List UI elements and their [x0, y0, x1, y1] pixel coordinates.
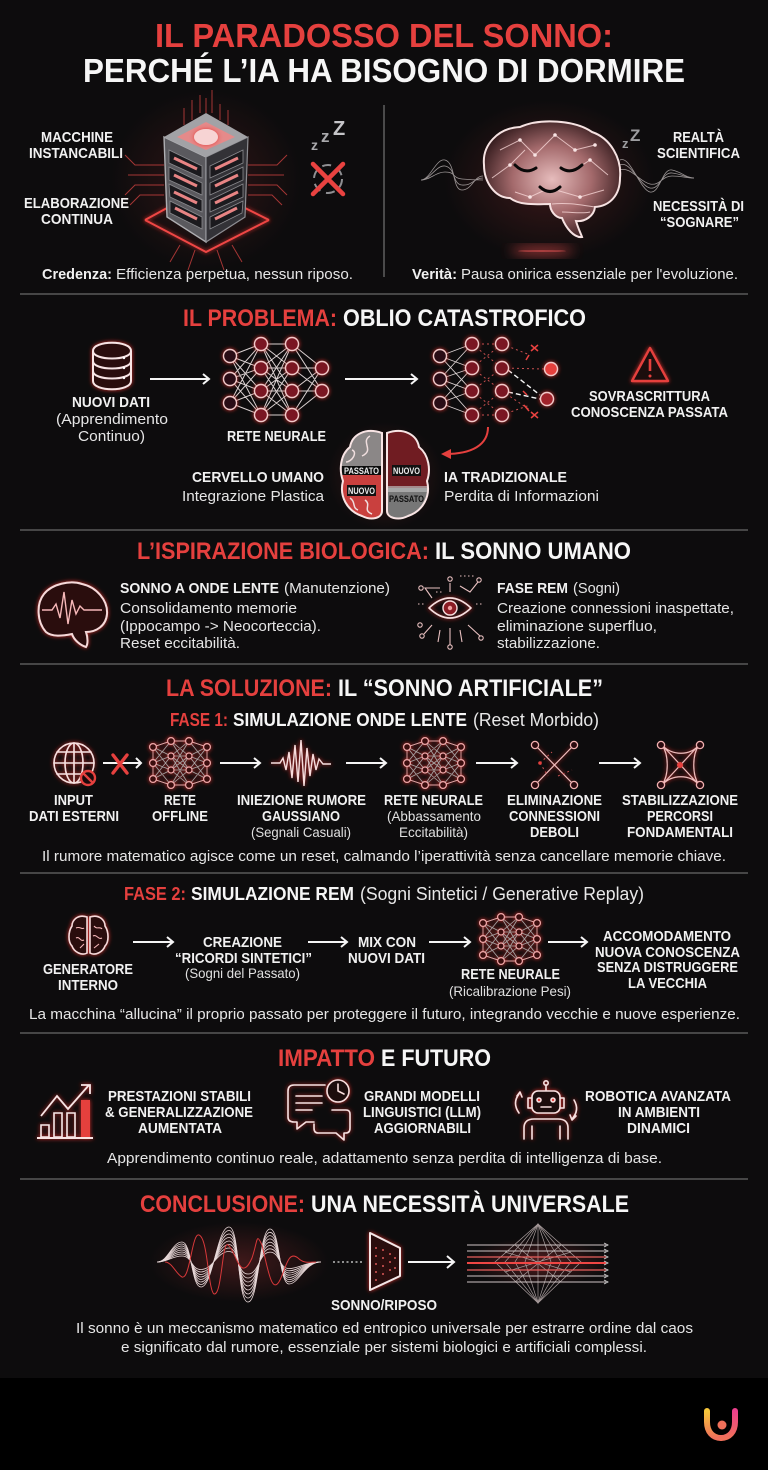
- arrow: [476, 758, 517, 768]
- text: generatore interno: GENERATORE: [43, 961, 133, 978]
- text: fase rem: Creazione connessioni inaspettate,: [497, 600, 734, 617]
- icon: rising bars: [37, 1085, 93, 1138]
- text: nuovi dati: NUOVI DATI: [72, 394, 150, 411]
- text: generatore interno: [43, 961, 133, 994]
- text: necessità di sognare: “SOGNARE”: [660, 214, 739, 231]
- text: rumore matematico: Il rumore matematico agisce come un reset, calmando l’iperattività senza cancellare memorie chiave.: [42, 848, 726, 865]
- text: stabilizzazione: FONDAMENTALI: [627, 824, 733, 841]
- heading: il problema: [183, 305, 586, 332]
- text: realtà scientifica: [657, 129, 740, 162]
- vertical divider: [383, 105, 385, 277]
- text: macchine instancabili: [29, 129, 123, 162]
- text: accomodamento: SENZA DISTRUGGERE: [597, 959, 738, 976]
- dots: [333, 1261, 364, 1263]
- text: allucina: La macchina “allucina” il proprio passato per proteggere il futuro, integrando vecchie e nuove esperienze.: [29, 1006, 740, 1023]
- text: ia tradizionale: [444, 469, 599, 505]
- text: fase rem: [497, 580, 734, 652]
- arrow: [408, 1256, 454, 1268]
- text: accomodamento: NUOVA CONOSCENZA: [595, 944, 740, 961]
- text: conclusione: Il sonno è un meccanismo matematico ed entropico universale per estrarre ordine dal caos: [76, 1320, 693, 1337]
- icon: small zz: z: [622, 136, 629, 151]
- text: nuovi dati: Continuo): [78, 428, 145, 445]
- heading: conclusione: [140, 1190, 629, 1218]
- heading: ispirazione biologica: [137, 538, 631, 565]
- text: prestazioni: [105, 1088, 253, 1137]
- text: macchine instancabili: MACCHINE: [41, 129, 113, 146]
- heading: fase 2: [124, 884, 644, 904]
- heading: fase 1: SIMULAZIONE ONDE LENTE: [233, 710, 467, 730]
- label: sonno/riposo: SONNO/RIPOSO: [331, 1297, 437, 1314]
- text: necessità di sognare: NECESSITÀ DI: [653, 198, 744, 215]
- heading: la soluzione: IL “SONNO ARTIFICIALE”: [338, 675, 603, 702]
- text: ricordi sintetici: (Sogni del Passato): [185, 965, 300, 981]
- text: iniezione rumore: (Segnali Casuali): [251, 824, 351, 840]
- text: credenza: Credenza:: [42, 266, 112, 283]
- heading: fase 2: (Sogni Sintetici / Generative Replay): [360, 884, 644, 904]
- text: accomodamento: ACCOMODAMENTO: [603, 928, 731, 945]
- text: fase rem: (Sogni): [573, 580, 620, 597]
- text: rete neurale abbassamento: (Abbassamento: [387, 808, 481, 824]
- text: iniezione rumore: [237, 792, 366, 840]
- panel: verità: [412, 100, 744, 283]
- text: cervello umano: [182, 469, 325, 505]
- heading: ispirazione biologica: L’ISPIRAZIONE BIOLOGICA:: [137, 538, 429, 565]
- heading: la soluzione: [166, 675, 603, 702]
- icon: chat and clock: [288, 1080, 350, 1140]
- arrow: [548, 937, 587, 947]
- arrow: [429, 937, 470, 947]
- text: grandi modelli: [363, 1088, 481, 1137]
- text: cervello umano: Integrazione Plastica: [182, 488, 325, 505]
- text: eliminazione: CONNESSIONI: [509, 808, 600, 825]
- icon: split brain: NUOVO: [393, 466, 420, 476]
- text: iniezione rumore: INIEZIONE RUMORE: [237, 792, 366, 809]
- icon: split brain: NUOVO: [348, 486, 375, 496]
- text: stabilizzazione: STABILIZZAZIONE: [622, 792, 738, 809]
- text: rete offline: RETE: [164, 792, 196, 809]
- text: prestazioni: AUMENTATA: [138, 1120, 222, 1137]
- text: eliminazione: DEBOLI: [530, 824, 579, 841]
- arrow: [345, 374, 417, 384]
- text: elaborazione continua: ELABORAZIONE: [24, 195, 129, 212]
- text: fase rem: eliminazione superfluo,: [497, 618, 657, 635]
- text: sovrascrittura: SOVRASCRITTURA: [589, 388, 710, 405]
- icon: zzz: z: [311, 137, 318, 153]
- arrow: [308, 937, 347, 947]
- icon: stable paths: [657, 741, 704, 789]
- chart: ordered lines: [466, 1224, 610, 1303]
- icon: zzz: z: [321, 127, 330, 146]
- icon: split brain: PASSATO: [344, 466, 379, 476]
- panel: la soluzione: [29, 675, 738, 865]
- icon: sleeping brain: [421, 100, 694, 260]
- chart: damaged neural network: [434, 338, 558, 422]
- panel: credenza: [24, 90, 353, 283]
- text: input dati esterni: DATI ESTERNI: [29, 808, 119, 825]
- text: sonno a onde lente: (Ippocampo -> Neocorteccia).: [120, 618, 321, 635]
- icon: small zz: Z: [630, 126, 640, 145]
- icon: warning: [632, 348, 668, 381]
- text: mix con nuovi dati: MIX CON: [358, 934, 416, 951]
- text: grandi modelli: AGGIORNABILI: [374, 1120, 471, 1137]
- text: conclusione: e significato dal rumore, essenziale per sistemi biologici e artificiali complessi.: [121, 1339, 647, 1356]
- text: cervello umano: CERVELLO UMANO: [192, 469, 324, 486]
- text: verità: Verità:: [412, 266, 457, 283]
- text: rete neurale pesi: (Ricalibrazione Pesi): [449, 983, 571, 999]
- icon: brain with wave: [39, 582, 107, 647]
- text: grandi modelli: GRANDI MODELLI: [364, 1088, 480, 1105]
- title: PERCHÉ L’IA HA BISOGNO DI DORMIRE: [83, 52, 685, 89]
- text: robotica: DINAMICI: [627, 1120, 690, 1137]
- heading: fase 2: FASE 2:: [124, 884, 186, 904]
- icon: eye with circuits: [418, 576, 483, 649]
- text: sonno a onde lente: Consolidamento memorie: [120, 600, 297, 617]
- icon: rete offline: [150, 738, 210, 788]
- arrow: curved red: [441, 427, 488, 459]
- text: prestazioni: PRESTAZIONI STABILI: [108, 1088, 251, 1105]
- text: accomodamento: LA VECCHIA: [628, 975, 707, 992]
- title: IL PARADOSSO DEL SONNO:: [155, 17, 613, 54]
- text: rete neurale abbassamento: Eccitabilità): [399, 824, 468, 840]
- text: elaborazione continua: [24, 195, 129, 228]
- text: rete offline: OFFLINE: [152, 808, 208, 825]
- icon: split brain: PASSATO: [389, 494, 424, 504]
- panel: ispirazione biologica: [39, 538, 734, 652]
- icon: weak connections: [531, 741, 578, 789]
- panel: impatto e futuro: [37, 1045, 731, 1167]
- text: robotica: [585, 1088, 731, 1137]
- panel: conclusione: [76, 1190, 693, 1356]
- text: input dati esterni: [29, 792, 119, 825]
- text: sonno a onde lente: (Manutenzione): [284, 580, 390, 597]
- text: necessità di sognare: [653, 198, 744, 231]
- text: rete neurale abbassamento: RETE NEURALE: [384, 792, 483, 809]
- icon: robot: [516, 1081, 577, 1139]
- text: sonno a onde lente: [120, 580, 390, 652]
- text: ia tradizionale: Perdita di Informazioni: [444, 488, 599, 505]
- heading: impatto: IMPATTO: [278, 1045, 375, 1072]
- icon: noise wave: [271, 740, 331, 786]
- text: ricordi sintetici: CREAZIONE: [203, 934, 282, 951]
- heading: fase 1: [170, 710, 599, 730]
- text: rete neurale abbassamento: [384, 792, 483, 840]
- text: nuovi dati: [56, 394, 168, 445]
- icon: database: [93, 343, 131, 389]
- text: eliminazione: [507, 792, 602, 841]
- arrow: [133, 937, 173, 947]
- panel: il problema: [56, 305, 728, 530]
- icon: globe blocked: [54, 743, 95, 785]
- text: mix con nuovi dati: [348, 934, 425, 967]
- text: rete offline: [152, 792, 208, 825]
- text: rete neurale: RETE NEURALE: [227, 428, 326, 445]
- text: rete neurale pesi: RETE NEURALE: [461, 966, 560, 983]
- heading: il problema: OBLIO CATASTROFICO: [343, 305, 586, 332]
- icon: crossed sleep: [313, 164, 343, 194]
- icon: small zz: [622, 126, 640, 151]
- chart: neural network: [224, 338, 328, 422]
- text: prestazioni: & GENERALIZZAZIONE: [105, 1104, 253, 1121]
- heading: conclusione: CONCLUSIONE:: [140, 1191, 305, 1218]
- text: eliminazione: ELIMINAZIONE: [507, 792, 602, 809]
- heading: ispirazione biologica: IL SONNO UMANO: [435, 538, 631, 565]
- text: generatore interno: INTERNO: [58, 977, 118, 994]
- text: input dati esterni: INPUT: [54, 792, 93, 809]
- heading: fase 1: (Reset Morbido): [473, 710, 599, 730]
- icon: server tower: [111, 90, 301, 270]
- text: sovrascrittura: CONOSCENZA PASSATA: [571, 404, 728, 421]
- heading: conclusione: UNA NECESSITÀ UNIVERSALE: [311, 1190, 629, 1218]
- chart: chaotic wave: [149, 1222, 329, 1302]
- icon: rete neurale: [404, 738, 464, 788]
- heading: la soluzione: LA SOLUZIONE:: [166, 675, 332, 702]
- icon: rete neurale: [480, 914, 540, 964]
- arrow: [150, 374, 209, 384]
- heading: il problema: IL PROBLEMA:: [183, 305, 337, 332]
- panel: fase 2: [29, 884, 740, 1023]
- text: credenza: Efficienza perpetua, nessun riposo.: [116, 266, 353, 283]
- text: rete neurale pesi: [449, 966, 571, 999]
- text: robotica: ROBOTICA AVANZATA: [585, 1088, 731, 1105]
- text: fase rem: stabilizzazione.: [497, 635, 600, 652]
- arrow: [346, 758, 386, 768]
- text: sovrascrittura: [571, 388, 728, 421]
- heading: fase 1: FASE 1:: [170, 710, 228, 730]
- text: robotica: IN AMBIENTI: [618, 1104, 700, 1121]
- text: realtà scientifica: SCIENTIFICA: [657, 145, 740, 162]
- heading: impatto: [278, 1045, 491, 1072]
- text: macchine instancabili: INSTANCABILI: [29, 145, 123, 162]
- text: stabilizzazione: PERCORSI: [647, 808, 713, 825]
- text: stabilizzazione: [622, 792, 738, 841]
- text: realtà scientifica: REALTÀ: [673, 129, 724, 146]
- icon: zzz: [311, 118, 345, 153]
- text: apprendimento continuo: Apprendimento continuo reale, adattamento senza perdita di intelligenza di base.: [107, 1150, 662, 1167]
- icon: split brain: [338, 430, 432, 520]
- icon: filter: [370, 1233, 400, 1290]
- text: accomodamento: [595, 928, 740, 992]
- text: mix con nuovi dati: NUOVI DATI: [348, 950, 425, 967]
- heading: impatto: E FUTURO: [381, 1045, 491, 1072]
- text: grandi modelli: LINGUISTICI (LLM): [363, 1104, 481, 1121]
- text: iniezione rumore: GAUSSIANO: [262, 808, 340, 825]
- arrow: blocked: [103, 755, 141, 773]
- heading: fase 2: SIMULAZIONE REM: [191, 884, 354, 904]
- text: ricordi sintetici: [175, 934, 312, 981]
- text: ricordi sintetici: “RICORDI SINTETICI”: [175, 950, 312, 967]
- text: sonno a onde lente: SONNO A ONDE LENTE: [120, 580, 279, 597]
- arrow: [220, 758, 260, 768]
- text: elaborazione continua: CONTINUA: [41, 211, 113, 228]
- text: nuovi dati: (Apprendimento: [56, 411, 168, 428]
- text: conclusione: [76, 1320, 693, 1356]
- text: sonno a onde lente: Reset eccitabilità.: [120, 635, 240, 652]
- icon: zzz: Z: [333, 118, 345, 140]
- arrow: [599, 758, 640, 768]
- text: ia tradizionale: IA TRADIZIONALE: [444, 469, 567, 486]
- title: [83, 17, 685, 89]
- icon: generator brain: [69, 916, 108, 954]
- logo: [707, 1411, 735, 1438]
- text: verità: Pausa onirica essenziale per l'evoluzione.: [461, 266, 738, 283]
- text: fase rem: FASE REM: [497, 580, 568, 597]
